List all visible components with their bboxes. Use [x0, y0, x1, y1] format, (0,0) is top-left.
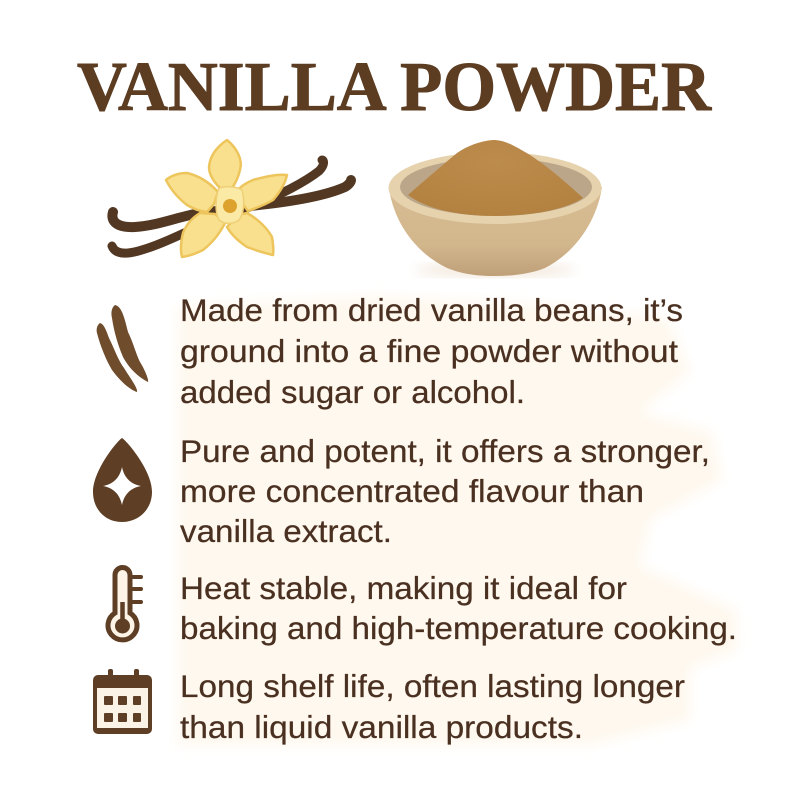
text block: ground into a fine powder without [180, 333, 678, 369]
illustration: bowl of vanilla powder [388, 140, 602, 277]
text block: Pure and potent, it offers a stronger, [180, 433, 710, 469]
powder pile [408, 140, 583, 216]
icon: vanilla beans [97, 305, 148, 392]
item 2 [93, 433, 710, 549]
text block: Made from dried vanilla beans, it’s [180, 292, 683, 328]
icon: calendar [93, 669, 152, 734]
text block [180, 433, 710, 549]
background wash [178, 296, 738, 745]
text block: vanilla extract. [180, 513, 392, 549]
flower stamen [223, 199, 237, 213]
item 4 [93, 668, 685, 745]
text block [180, 292, 683, 410]
text block [180, 570, 737, 646]
bowl shadow [415, 263, 575, 277]
text block: Heat stable, making it ideal for [180, 570, 627, 606]
item 3 [108, 568, 737, 646]
text block [180, 668, 685, 745]
text block: than liquid vanilla products. [180, 709, 583, 745]
item 1 [97, 292, 683, 410]
icon: drop with sparkle [93, 438, 152, 522]
illustration: vanilla flower and beans [112, 140, 351, 257]
flower centre [216, 187, 244, 223]
bowl interior [400, 158, 592, 216]
text block: more concentrated flavour than [180, 473, 644, 509]
icon: thermometer [108, 568, 141, 640]
text block: Long shelf life, often lasting longer [180, 668, 685, 704]
text block: added sugar or alcohol. [180, 374, 525, 410]
title: VANILLA POWDER [77, 49, 712, 126]
flower petals [166, 140, 287, 257]
text block: baking and high-temperature cooking. [180, 610, 737, 646]
vanilla beans [112, 160, 351, 253]
bowl body [389, 187, 602, 276]
bowl rim [388, 152, 602, 224]
